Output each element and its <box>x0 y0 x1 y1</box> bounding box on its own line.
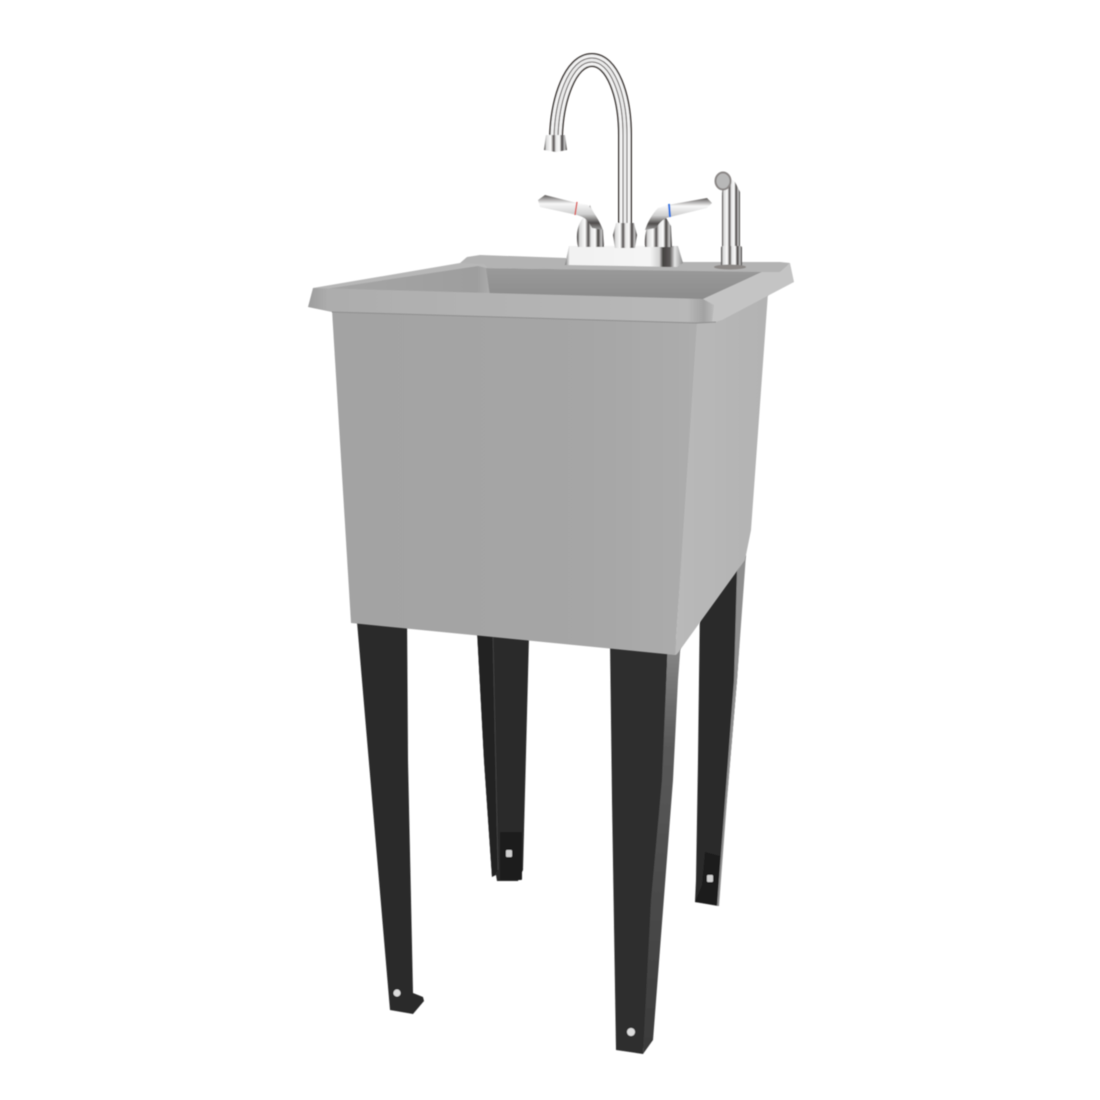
faucet: right handle lever <box>645 198 712 230</box>
faucet: aerator nut <box>544 135 567 152</box>
rim: lip underside line <box>332 312 716 323</box>
faucet: gooseneck light band <box>556 60 625 240</box>
sprayer: flange <box>714 264 746 270</box>
rim: front lip <box>308 288 716 323</box>
faucet: center nut <box>613 223 637 248</box>
sprayer: head <box>716 172 730 190</box>
leg: back left <box>477 630 529 881</box>
sprayer: handle <box>722 195 740 247</box>
leg: back right <box>695 555 746 906</box>
rim: top surface left <box>313 263 490 292</box>
faucet: gooseneck spout edge <box>556 60 625 240</box>
leg: front right <box>610 640 681 1054</box>
sprayer: neck <box>722 174 740 200</box>
tub: body front and side <box>332 293 768 655</box>
faucet: gooseneck dark reflection <box>556 60 625 240</box>
faucet <box>538 60 712 267</box>
faucet: red hot indicator <box>575 202 577 215</box>
sprayer: base <box>721 246 742 267</box>
faucet: blue cold indicator <box>669 204 670 217</box>
faucet: right handle hub <box>645 208 672 247</box>
basin: back wall <box>484 268 762 300</box>
faucet: gooseneck center highlight <box>556 60 625 240</box>
rim: far back ledge <box>460 255 790 273</box>
leg: front left <box>356 610 424 1014</box>
faucet: deck plate <box>565 246 683 267</box>
basin: left wall <box>325 266 490 296</box>
rim: right lip <box>703 263 794 323</box>
faucet: left handle lever <box>538 195 603 230</box>
faucet: left handle hub <box>577 205 604 247</box>
side sprayer <box>714 172 746 270</box>
tub: rim and basin <box>308 255 794 323</box>
